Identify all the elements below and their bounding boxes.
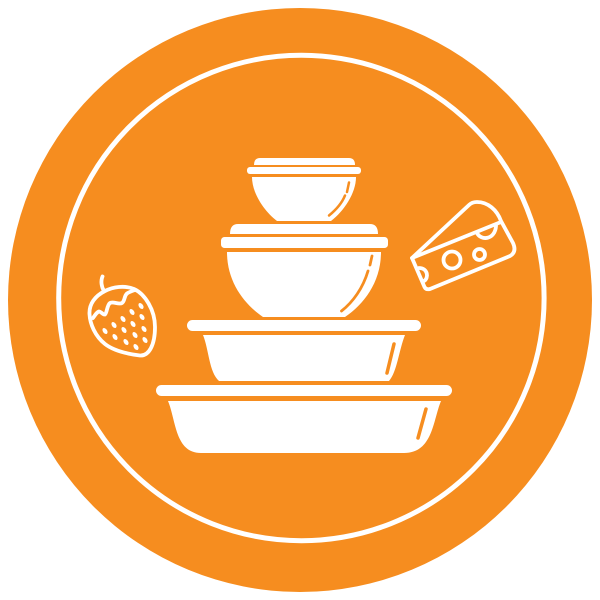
medium bowl with lid [221,224,388,317]
white inner ring [59,55,544,541]
icon: strawberry [89,276,155,356]
icon: cheese wedge [412,202,514,289]
icon: stacked food containers [156,158,452,453]
strawberry seeds [101,302,149,351]
medium baking dish with lid [187,320,421,381]
large baking dish with lid [156,385,452,453]
small bowl with lid [247,158,361,221]
